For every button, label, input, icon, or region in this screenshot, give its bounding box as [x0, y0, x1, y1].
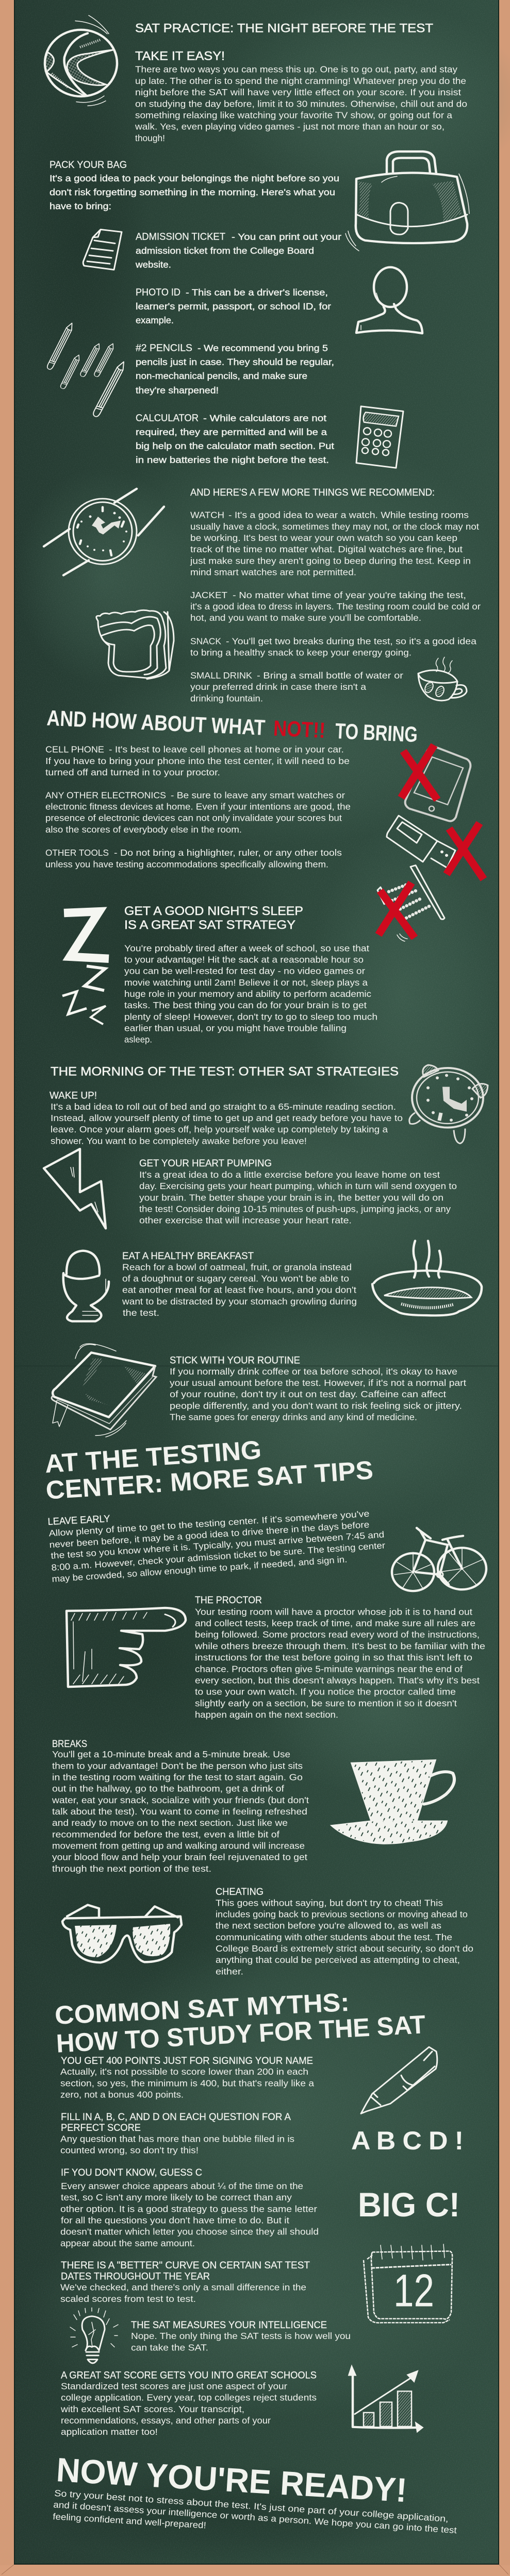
text block: stick with routine: If you normally drink coffee or tea before school, it's okay to have: [170, 1366, 457, 1377]
heading: at the testing center: CENTER: MORE SAT TIPS: [45, 1455, 374, 1505]
text block: better curve myth: We've checked, and there's only a small difference in the: [60, 2282, 306, 2293]
icon: light bulb: [70, 2308, 118, 2363]
text block: cheating: communicating with other students about the test. The: [216, 1932, 452, 1942]
text block: 400 points myth: YOU GET 400 POINTS JUST FOR SIGNING YOUR NAME: [61, 2055, 313, 2066]
heading: what not to bring: [46, 706, 418, 747]
text block: sleep strategy: movie watching until 2am! Believe it or not, sleep plays a: [124, 977, 368, 988]
text block: wake up: Instead, allow yourself plenty of time to get up and get ready before you have to: [51, 1113, 403, 1123]
text block: closing message: [53, 2488, 457, 2535]
text block: great schools myth: college application. Every year, top colleges reject students: [61, 2393, 317, 2403]
icon: calculator: [356, 406, 403, 468]
text block: calculator: required, they are permitted and will be a: [136, 427, 327, 437]
text block: great schools myth: [60, 2370, 317, 2437]
text block: admission ticket: [135, 231, 341, 270]
text block: pencils: pencils just in case. They should be regular,: [136, 357, 334, 367]
heading: take it easy: TAKE IT EASY!: [135, 49, 225, 63]
text block: cell phone: [45, 744, 350, 777]
text block: guess C myth: [60, 2167, 319, 2248]
text block: stick with routine: STICK WITH YOUR ROUTINE: [170, 1355, 300, 1366]
text block: heart pumping: day. Exercising gets your heart pumping, which in turn will send oxygen to: [139, 1181, 457, 1191]
heading: now you're ready: NOW YOU'RE READY!: [55, 2451, 408, 2510]
section: more recommendations: [44, 487, 481, 703]
text block: fill in ABCD myth: [60, 2111, 294, 2155]
text block: wake up: [50, 1090, 403, 1146]
text block: pencils: they're sharpened!: [136, 385, 219, 396]
icon: backpack: [346, 151, 469, 251]
text block: pack your bag intro: have to bring:: [50, 201, 111, 211]
icon: alarm clock: [409, 1065, 488, 1143]
heading: more recommendations: AND HERE'S A FEW MORE THINGS WE RECOMMEND:: [190, 487, 435, 498]
text block: heart pumping: other exercise that will increase your heart rate.: [139, 1215, 352, 1226]
chalk lettering: A B C D: A B C D !: [351, 2126, 464, 2155]
text block: better curve myth: scaled scores from test to test.: [60, 2294, 196, 2304]
heading: common myths: HOW TO STUDY FOR THE SAT: [55, 2010, 426, 2058]
icon: basketball: [45, 15, 117, 106]
text block: photo id: learner's permit, passport, or school ID, for: [136, 301, 331, 312]
text block: stick with routine: your usual amount before the test. However, if it's not a normal part: [170, 1378, 466, 1388]
text block: cell phone: If you have to bring your phone into the test center, it will need to be: [45, 756, 350, 766]
text block: stick with routine: of your routine, don't try it out on test day. Caffeine can affect: [170, 1389, 446, 1399]
text block: pencils: non-mechanical pencils, and make sure: [136, 371, 307, 381]
icon: sandwich: [96, 610, 174, 679]
text block: other tools: - Do not bring a highlighter, ruler, or any other tools: [114, 848, 342, 858]
text block: guess C myth: doesn't matter which letter you choose since they all should: [60, 2227, 319, 2237]
section: the night before: [45, 15, 467, 143]
text block: sleep strategy: plenty of sleep! However, don't try to go to sleep too much: [124, 1012, 377, 1022]
icon: calendar: 12: [393, 2265, 434, 2316]
icon: crossed-out abacus: [377, 866, 445, 941]
text block: breaks: water, eat your snack, socialize with your friends (but don't: [52, 1795, 309, 1805]
text block: wake up: It's a bad idea to roll out of bed and go straight to a 65-minute reading section.: [51, 1101, 396, 1112]
text block: snack: to bring a healthy snack to keep your energy going.: [190, 648, 412, 658]
text block: sleep strategy: earlier than usual, or you might have trouble falling: [124, 1023, 347, 1033]
text block: other tools: OTHER TOOLS: [45, 848, 109, 858]
text block: heart pumping: [139, 1158, 457, 1226]
text block: leave early: 8:00 a.m. However, check your admission ticket to be sure. The testing center: [51, 1540, 386, 1573]
text block: photo id: PHOTO ID: [136, 287, 180, 298]
text block: pencils: [136, 343, 334, 396]
text block: the proctor: every section, but this doesn't always happen. That's why it's best: [195, 1675, 480, 1685]
text block: guess C myth: for all the questions you don't have time to do. But it: [61, 2215, 289, 2225]
text block: leave early: never been before, it may be a good idea to drive there in the days before: [49, 1519, 370, 1550]
text block: admission ticket: - You can print out your: [232, 232, 341, 242]
text block: other electronics: also the scores of everybody else in the room.: [45, 824, 242, 835]
text block: better curve myth: THERE IS A "BETTER" CURVE ON CERTAIN SAT TEST: [61, 2260, 310, 2271]
text block: heart pumping: It's a great idea to do a little exercise before you leave home on test: [139, 1170, 440, 1180]
text block: guess C myth: test, so C isn't any more likely to be correct than any: [61, 2192, 292, 2202]
text block: 400 points myth: section, so yes, the minimum is 400, but that's really like a: [60, 2078, 314, 2088]
text block: breaks: talk about the test). You want to come in feeling refreshed: [52, 1806, 307, 1817]
heading: common myths: [54, 1988, 426, 2058]
text block: cheating: either.: [216, 1967, 243, 1976]
text block: take it easy: [135, 64, 467, 143]
text block: other electronics: electronic fitness devices at home. Even if your intentions are good, the: [45, 802, 351, 811]
heading: what not to bring: AND HOW ABOUT WHAT: [46, 706, 266, 740]
text block: pack your bag intro: [50, 173, 339, 211]
text block: closing message: feeling confident and well-prepared!: [53, 2511, 206, 2530]
text block: the proctor: and collect tests, keep track of time, and make sure all rules are: [195, 1618, 475, 1629]
icon: wristwatch: [44, 489, 164, 575]
text block: wake up: shower. You want to be completely awake before you leave!: [51, 1136, 307, 1146]
text block: guess C myth: Every answer choice appears about ¼ of the time on the: [61, 2181, 303, 2191]
heading: what not to bring: TO BRING: [335, 719, 418, 747]
text block: calculator: big help on the calculator math section. Put: [136, 441, 334, 451]
text block: calculator: in new batteries the night before the test.: [136, 455, 329, 465]
section: morning of the test: [44, 1065, 488, 1437]
text block: the proctor: chance. Proctors often give 5-minute warnings near the end of: [195, 1664, 463, 1674]
text block: leave early: LEAVE EARLY: [47, 1513, 110, 1528]
text block: small drink: your preferred drink in case there isn't a: [190, 682, 366, 692]
text block: pack your bag intro: It's a good idea to pack your belongings the night before so you: [50, 173, 339, 183]
text block: breaks: movement from getting up and walking around will increase: [52, 1841, 305, 1851]
text block: sleep strategy: to your advantage! Hit the sack at a reasonable hour so: [124, 955, 364, 964]
text block: other tools: [45, 848, 342, 869]
text block: take it easy: night before the SAT will have very little effect on your score. If you insist: [135, 87, 461, 97]
text block: sleep strategy: You're probably tired after a week of school, so use that: [124, 943, 369, 953]
title: SAT PRACTICE: THE NIGHT BEFORE THE TEST: [135, 22, 433, 36]
text block: watch: mind smart watches are not permitted.: [190, 567, 356, 577]
text block: the proctor: to use your own watch. If you notice the proctor called time: [195, 1687, 456, 1697]
text block: jacket: hot, and you want to make sure you'll be comfortable.: [190, 613, 421, 623]
text block: photo id: - This can be a driver's license,: [186, 287, 328, 298]
text block: photo id: example.: [136, 315, 174, 326]
text block: guess C myth: other option. It is a good strategy to guess the same letter: [60, 2204, 317, 2214]
text block: snack: [190, 636, 476, 658]
text block: great schools myth: Standardized test scores are just one aspect of your: [61, 2381, 287, 2391]
text block: breaks: and ready to move on to the next section. Just like we: [52, 1818, 288, 1828]
text block: cheating: This goes without saying, but don't try to cheat! This: [216, 1898, 443, 1908]
text block: jacket: JACKET: [190, 590, 227, 600]
text block: fill in ABCD myth: FILL IN A, B, C, AND D ON EACH QUESTION FOR A: [61, 2111, 291, 2123]
icon: pointing hand: [67, 1608, 186, 1687]
text block: sleep strategy: tasks. The best thing you can do for your brain is to get: [124, 1000, 367, 1010]
text block: admission ticket: website.: [135, 260, 171, 270]
text block: breaks: out in the hallway, go to the bathroom, get a drink of: [52, 1784, 284, 1794]
text block: other electronics: ANY OTHER ELECTRONICS: [45, 790, 166, 800]
text block: great schools myth: with excellent SAT scores. Your transcript,: [60, 2404, 244, 2414]
text block: the proctor: slightly early on a section, be sure to mention it so it doesn't: [195, 1698, 457, 1708]
text block: cheating: anything that could be perceived as attempting to cheat,: [216, 1955, 460, 1965]
text block: cell phone: turned off and turned in to your proctor.: [45, 767, 220, 777]
text block: sleep strategy: [124, 943, 377, 1045]
heading: sleep strategy: GET A GOOD NIGHT'S SLEEP: [124, 904, 303, 918]
heading: common myths: COMMON SAT MYTHS:: [54, 1988, 350, 2030]
text block: breaks: [52, 1738, 309, 1874]
text block: admission ticket: admission ticket from the College Board: [136, 246, 314, 256]
text block: breaks: in the testing room waiting for the test to start again. Go: [52, 1772, 303, 1782]
icon: bicycle: [392, 1528, 486, 1591]
text block: jacket: it's a good idea to dress in layers. The testing room could be cold or: [190, 601, 481, 612]
icon: pen: [361, 2047, 437, 2113]
icon: pencils: [46, 322, 127, 418]
text block: watch: WATCH: [190, 510, 224, 520]
text block: other electronics: [45, 790, 351, 835]
chart icon: rising bar graph: [349, 2366, 423, 2432]
text block: small drink: [190, 670, 403, 703]
text block: watch: usually have a clock, sometimes they may not, or the clock may not: [190, 521, 479, 532]
text block: other electronics: presence of electronic devices can not only invalidate your scores but: [45, 813, 342, 823]
text block: stick with routine: people differently, and you don't want to risk feeling sick or jittery.: [170, 1401, 462, 1411]
text block: pencils: #2 PENCILS: [136, 343, 192, 354]
text block: cell phone: CELL PHONE: [45, 744, 104, 755]
icon: crossed-out USB drive: [387, 816, 484, 879]
text block: photo id: [136, 287, 331, 326]
section: pack your bag: [46, 151, 469, 468]
text block: closing message: So try your best not to stress about the test. It's just one part of your college application,: [54, 2488, 449, 2524]
text block: better curve myth: DATES THROUGHOUT THE YEAR: [61, 2271, 210, 2282]
text block: cheating: College Board is extremely strict about security, so don't do: [216, 1943, 473, 1954]
text block: the proctor: [194, 1595, 485, 1720]
text block: small drink: - Bring a small bottle of water or: [257, 670, 403, 681]
text block: cheating: CHEATING: [216, 1886, 264, 1897]
text block: cheating: the next section before you're allowed to, as well as: [216, 1921, 441, 1931]
heading: pack your bag: PACK YOUR BAG: [50, 159, 127, 171]
text block: leave early: may be crowded, so allow enough time to park, if needed, and sign in.: [52, 1554, 348, 1584]
text block: calculator: CALCULATOR: [136, 413, 199, 423]
text block: the proctor: instructions for the test before going in so that this isn't left to: [195, 1652, 472, 1663]
text block: guess C myth: appear about the same amount.: [60, 2238, 195, 2248]
text block: breaks: through the next portion of the test.: [52, 1863, 211, 1874]
text block: heart pumping: your brain. The better shape your brain is in, the better you will do on: [139, 1193, 443, 1202]
text block: other tools: unless you have testing accommodations specifically allowing them.: [45, 859, 328, 869]
text block: snack: SNACK: [190, 636, 221, 646]
text block: leave early: the test so you know where it is. Typically, you must arrive between 7:45 and: [51, 1529, 385, 1561]
heading: sleep strategy: [124, 904, 303, 932]
text block: the proctor: while others breeze through them. It's best to be familiar with the: [194, 1641, 485, 1651]
text block: breaks: them to your advantage! Don't be the person who just sits: [52, 1761, 303, 1771]
heading: at the testing center: AT THE TESTING: [44, 1435, 262, 1478]
text block: the proctor: Your testing room will have a proctor whose job it is to hand out: [195, 1607, 472, 1617]
text block: wake up: leave. Once your alarm goes off, help yourself wake up completely by taking a: [51, 1125, 388, 1134]
chalk lettering: big C: BIG C!: [358, 2187, 460, 2224]
text block: intelligence myth: can take the SAT.: [131, 2343, 208, 2352]
text block: take it easy: up late. The other is to spend the night cramming! Whatever prep you do the: [135, 76, 466, 86]
text block: take it easy: walk. Yes, even playing video games - just not more than an hour or so,: [135, 122, 445, 132]
heading: what not to bring: NOT!!: [273, 716, 326, 743]
text block: the proctor: happen again on the next section.: [195, 1709, 338, 1720]
heading: morning strategies: THE MORNING OF THE TEST: OTHER SAT STRATEGIES: [51, 1065, 399, 1078]
text block: closing message: and it doesn't assess your intelligence or worth as a person. We hope you can go into the test: [53, 2499, 457, 2535]
text block: 400 points myth: Actually, it's not possible to score lower than 200 in each: [60, 2066, 308, 2077]
text block: cheating: includes going back to previous sections or moving ahead to: [216, 1909, 468, 1919]
icon: ZZZ sleep letters: [62, 911, 109, 1024]
icon: egg cup: [63, 1251, 109, 1321]
text block: other electronics: - Be sure to leave any smart watches or: [171, 790, 345, 800]
text block: 400 points myth: zero, not a bonus 400 points.: [60, 2090, 184, 2099]
text block: healthy breakfast: want to be distracted by your stomach growling during: [122, 1296, 357, 1307]
text block: great schools myth: application matter too!: [61, 2427, 158, 2437]
text block: 400 points myth: [60, 2055, 314, 2099]
text block: intelligence myth: Nope. The only thing the SAT tests is how well you: [131, 2331, 351, 2341]
text block: take it easy: something relaxing like watching your favorite TV show, or going out for a: [135, 110, 452, 120]
text block: take it easy: on studying the day before, limit it to 30 minutes. Otherwise, chill out and do: [135, 99, 467, 109]
text block: fill in ABCD myth: PERFECT SCORE: [61, 2122, 141, 2133]
icon: book: [52, 1344, 156, 1437]
text block: heart pumping: GET YOUR HEART PUMPING: [139, 1158, 272, 1169]
text block: better curve myth: [60, 2260, 310, 2304]
text block: calculator: [136, 413, 334, 465]
text block: watch: track of the time no matter what. Digital watches are fine, but: [190, 544, 463, 554]
text block: watch: - It's a good idea to wear a watch. While testing rooms: [228, 510, 469, 520]
text block: leave early: [47, 1509, 386, 1584]
text block: sleep strategy: huge role in your memory and ability to perform academic: [124, 989, 371, 999]
text block: healthy breakfast: [122, 1250, 357, 1318]
text block: heart pumping: the test! Consider doing 10-15 minutes of push-ups, jumping jacks, or any: [139, 1204, 451, 1214]
text block: healthy breakfast: Reach for a bowl of oatmeal, fruit, or granola instead: [122, 1262, 352, 1272]
icon: admission ticket: [83, 229, 122, 270]
text block: breaks: recommended for before the test, even a little bit of: [52, 1829, 279, 1839]
section: now you're ready: [53, 2451, 457, 2535]
text block: jacket: - No matter what time of year you're taking the test,: [233, 590, 466, 600]
text block: healthy breakfast: the test.: [123, 1308, 159, 1318]
text block: snack: - You'll get two breaks during the test, so it's a good idea: [226, 636, 476, 646]
text block: jacket: [190, 590, 481, 623]
text block: sleep strategy: asleep.: [124, 1035, 152, 1045]
icon: teacup and saucer: [331, 1760, 454, 1844]
text block: intelligence myth: [131, 2319, 351, 2352]
text block: wake up: WAKE UP!: [50, 1090, 97, 1101]
icon: calendar: [364, 2244, 452, 2323]
text block: fill in ABCD myth: Any question that has more than one bubble filled in is: [60, 2134, 294, 2144]
text block: guess C myth: IF YOU DON'T KNOW, GUESS C: [61, 2167, 202, 2178]
text block: stick with routine: The same goes for energy drinks and any kind of medicine.: [170, 1412, 417, 1422]
section: common SAT myths: [54, 1988, 464, 2437]
text block: the proctor: THE PROCTOR: [195, 1595, 262, 1606]
section: what not to bring: [45, 706, 484, 941]
icon: glasses: [62, 1905, 182, 1962]
text block: the proctor: being followed. Some proctors read every word of the instructions,: [195, 1630, 480, 1640]
text block: cheating: [216, 1886, 473, 1976]
text block: leave early: Allow plenty of time to get to the testing center. If it's somewhere you've: [48, 1509, 370, 1538]
text block: fill in ABCD myth: counted wrong, so don't try this!: [60, 2145, 199, 2155]
section: at the testing center: [44, 1435, 486, 1976]
text block: take it easy: There are two ways you can mess this up. One is to go out, party, and stay: [135, 64, 457, 75]
text block: breaks: your blood flow and help your brain feel rejuvenated to get: [52, 1852, 307, 1862]
icon: lightning bolt: [44, 1149, 106, 1228]
icon: steaming bowl: [372, 1241, 482, 1315]
section: good night's sleep: [62, 904, 377, 1045]
heading: sleep strategy: IS A GREAT SAT STRATEGY: [124, 918, 295, 932]
text block: pencils: - We recommend you bring 5: [198, 343, 328, 353]
text block: cell phone: - It's best to leave cell phones at home or in your car.: [109, 744, 344, 755]
text block: breaks: BREAKS: [52, 1738, 87, 1750]
text block: watch: be working. It's best to wear your own watch so you can keep: [190, 533, 457, 543]
text block: great schools myth: A GREAT SAT SCORE GETS YOU INTO GREAT SCHOOLS: [61, 2370, 317, 2381]
text block: admission ticket: ADMISSION TICKET: [136, 231, 225, 243]
icon: person silhouette: [356, 267, 422, 333]
text block: take it easy: though!: [135, 133, 165, 143]
text block: small drink: SMALL DRINK: [190, 670, 252, 681]
text block: stick with routine: [170, 1355, 466, 1422]
icon: coffee cup: [418, 657, 467, 701]
text block: calculator: - While calculators are not: [203, 413, 326, 423]
icon: crossed-out tablet: [401, 745, 470, 821]
text block: watch: [190, 510, 479, 577]
text block: breaks: You'll get a 10-minute break and a 5-minute break. Use: [52, 1749, 290, 1759]
text block: great schools myth: recommendations, essays, and other parts of your: [61, 2415, 271, 2426]
text block: pack your bag intro: don't risk forgetting something in the morning. Here's what you: [50, 187, 335, 197]
text block: healthy breakfast: EAT A HEALTHY BREAKFAST: [122, 1250, 254, 1262]
text block: watch: just make sure they aren't going to beep during the test. Keep in: [190, 556, 471, 566]
text block: healthy breakfast: eat another meal for at least five hours, and you don't: [122, 1285, 356, 1295]
text block: small drink: drinking fountain.: [190, 693, 263, 703]
text block: intelligence myth: THE SAT MEASURES YOUR INTELLIGENCE: [131, 2319, 327, 2331]
text block: sleep strategy: you can be well-rested for test day - no video games or: [124, 966, 365, 976]
text block: healthy breakfast: of a doughnut or sugary cereal. You won't be able to: [122, 1274, 349, 1283]
